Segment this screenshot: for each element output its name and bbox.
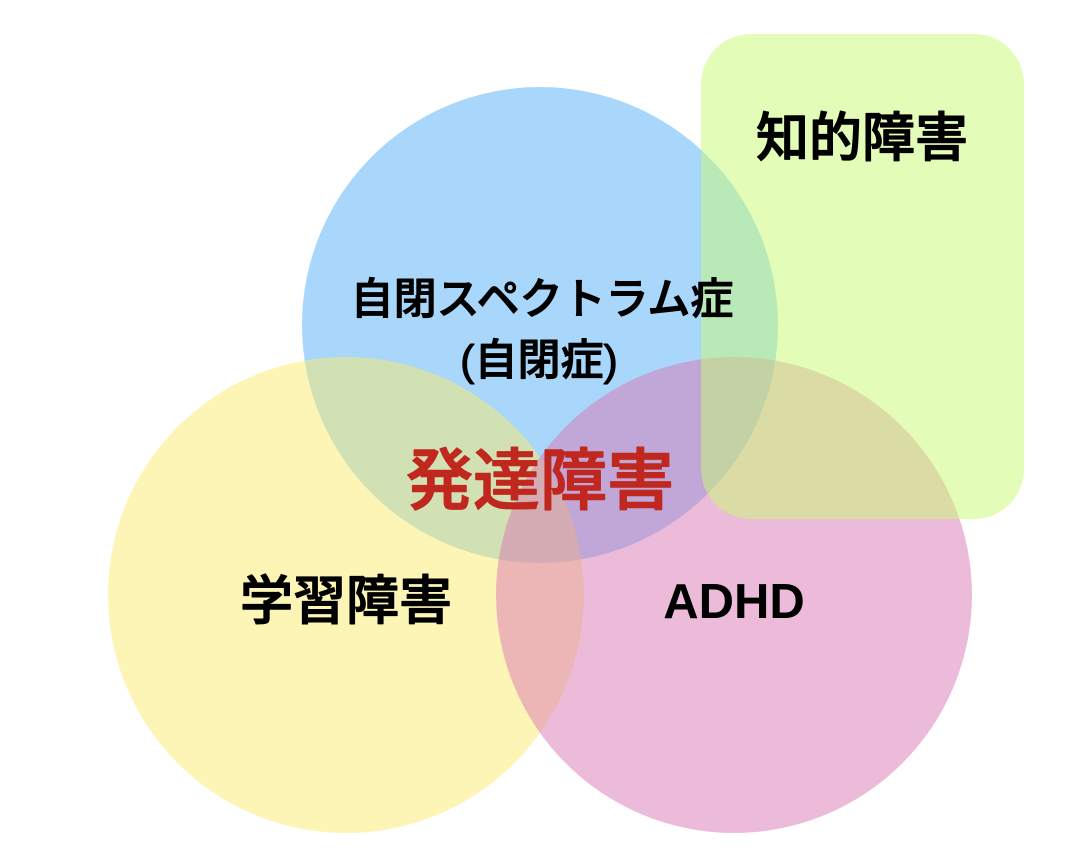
label: developmental disorder: 発達障害: [406, 444, 674, 519]
circle: autism spectrum: [302, 87, 778, 563]
circle: ADHD: [496, 357, 972, 833]
label: ADHD: ADHD: [663, 575, 805, 629]
label: intellectual disability: 知的障害: [756, 109, 968, 168]
panel: intellectual disability: [701, 34, 1024, 519]
label: learning disability: 学習障害: [240, 572, 452, 631]
circle: learning disability: [108, 357, 584, 833]
label: autism spectrum disorder: 自閉スペクトラム症: [351, 276, 733, 324]
label: autism: (自閉症): [460, 337, 618, 385]
